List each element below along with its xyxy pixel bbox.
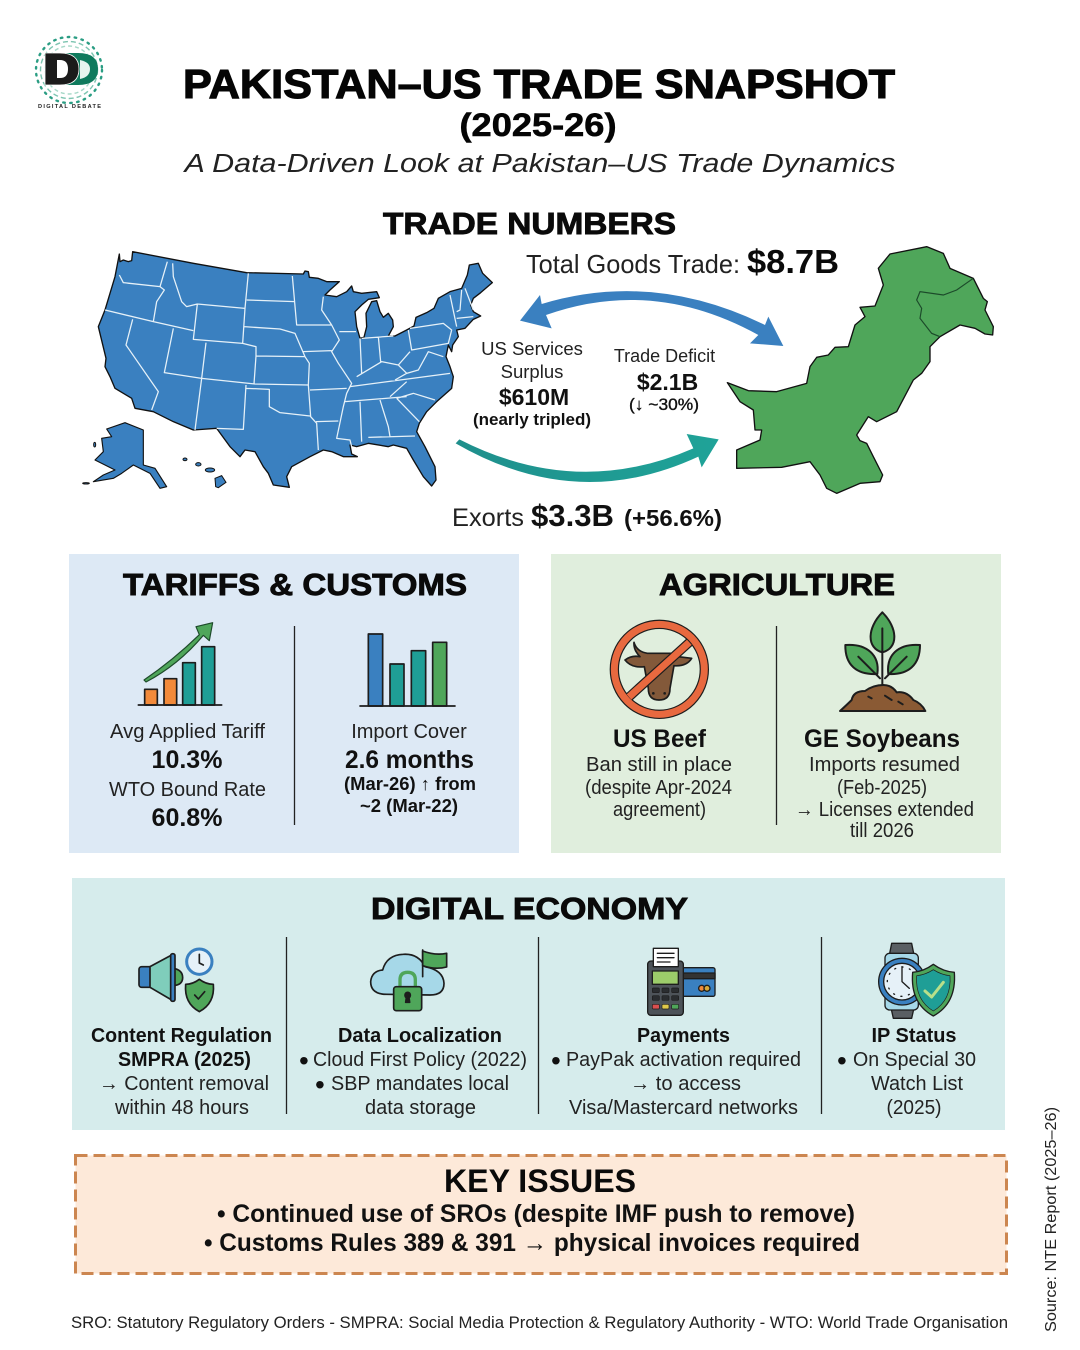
data localization: • — [315, 1069, 325, 1100]
US services surplus: (nearly tripled) — [473, 410, 591, 429]
glossary footer: SRO: Statutory Regulatory Orders - SMPRA: Social Media Protection & Regulatory Authority - WTO: World Trade Organisation — [71, 1314, 1008, 1332]
GE soybeans — [795, 725, 974, 842]
GE soybeans: → Licenses extended — [795, 799, 974, 821]
total goods trade: $8.7B — [747, 243, 839, 280]
arrow: two-way services trade — [520, 291, 783, 346]
heading: digital economy: DIGITAL ECONOMY — [371, 891, 688, 926]
total goods trade: Total Goods Trade: — [526, 249, 740, 279]
exports — [452, 498, 722, 533]
data localization: data storage — [365, 1097, 476, 1119]
trade deficit: $2.1B — [637, 369, 698, 395]
map: United States — [83, 252, 492, 488]
data localization: Data Localization — [338, 1025, 502, 1047]
exports: (+56.6%) — [624, 505, 722, 531]
panel: key issues — [76, 1156, 1006, 1274]
title — [183, 61, 895, 143]
US beef: agreement) — [613, 799, 706, 821]
US services surplus: Surplus — [501, 361, 563, 382]
data localization: Cloud First Policy (2022) — [313, 1049, 527, 1071]
icon: soybean sprout — [840, 612, 925, 711]
icon: cloud, lock and flag — [371, 950, 447, 1011]
exports: Exorts — [452, 504, 524, 532]
issues list: • Continued use of SROs (despite IMF push to remove) — [217, 1200, 855, 1228]
avg applied tariff and bound rate: 10.3% — [152, 746, 222, 774]
content regulation: → Content removal — [99, 1073, 269, 1095]
heading: agriculture: AGRICULTURE — [659, 567, 895, 602]
heading: tariffs and customs: TARIFFS & CUSTOMS — [123, 567, 467, 602]
subtitle: A Data-Driven Look at Pakistan–US Trade Dynamics — [182, 150, 896, 178]
payments: • — [551, 1045, 561, 1076]
payments — [551, 1025, 801, 1119]
heading: trade numbers: TRADE NUMBERS — [383, 206, 676, 241]
exports: $3.3B — [531, 498, 614, 533]
data localization: • — [299, 1045, 309, 1076]
import cover: 2.6 months — [345, 746, 474, 774]
trade deficit — [614, 346, 715, 414]
avg applied tariff and bound rate — [109, 721, 266, 832]
avg applied tariff and bound rate: 60.8% — [152, 804, 222, 832]
content regulation: within 48 hours — [114, 1097, 249, 1119]
US services surplus: $610M — [499, 384, 569, 410]
GE soybeans: GE Soybeans — [804, 725, 960, 753]
title: PAKISTAN–US TRADE SNAPSHOT — [183, 61, 895, 107]
IP status: (2025) — [886, 1097, 942, 1119]
US beef — [585, 725, 732, 821]
IP status — [837, 1025, 976, 1119]
issues list — [204, 1200, 860, 1257]
avg applied tariff and bound rate: WTO Bound Rate — [109, 779, 266, 801]
US beef: Ban still in place — [586, 754, 732, 776]
heading: key issues: KEY ISSUES — [444, 1163, 636, 1199]
map: Pakistan — [727, 247, 993, 493]
GE soybeans: (Feb-2025) — [837, 777, 927, 799]
icon: megaphone, clock and shield — [139, 949, 213, 1012]
arrow: exports to US — [456, 434, 719, 482]
total goods trade — [526, 243, 839, 280]
US beef: US Beef — [613, 725, 707, 753]
IP status: Watch List — [871, 1073, 963, 1095]
icon: watch and shield — [879, 943, 955, 1018]
data localization — [299, 1025, 527, 1119]
source note: Source: NTE Report (2025–26) — [1043, 1107, 1060, 1332]
panel: agriculture — [551, 554, 1001, 853]
content regulation — [91, 1025, 272, 1119]
data localization: SBP mandates local — [331, 1073, 509, 1095]
payments: Visa/Mastercard networks — [569, 1097, 798, 1119]
import cover: Import Cover — [351, 721, 467, 743]
logo: Digital Debate: DIGITAL DEBATE — [38, 104, 101, 110]
US services surplus: US Services — [481, 338, 583, 359]
IP status: IP Status — [872, 1025, 956, 1047]
trade deficit: Trade Deficit — [614, 346, 715, 366]
US beef: (despite Apr-2024 — [585, 777, 732, 799]
content regulation: SMPRA (2025) — [118, 1049, 251, 1071]
icon: import cover bars — [360, 634, 455, 706]
panel: tariffs and customs — [69, 554, 519, 853]
avg applied tariff and bound rate: Avg Applied Tariff — [110, 721, 265, 743]
import cover — [344, 721, 476, 816]
GE soybeans: till 2026 — [850, 820, 914, 842]
import cover: (Mar-26) ↑ from — [344, 774, 476, 794]
issues list: • Customs Rules 389 & 391 → physical invoices required — [204, 1229, 860, 1257]
GE soybeans: Imports resumed — [809, 754, 960, 776]
trade deficit: (↓ ~30%) — [629, 396, 699, 414]
IP status: • — [837, 1045, 847, 1076]
import cover: ~2 (Mar-22) — [360, 796, 458, 816]
IP status: On Special 30 — [853, 1049, 976, 1071]
title: (2025-26) — [460, 107, 616, 143]
US services surplus — [473, 338, 591, 429]
content regulation: Content Regulation — [91, 1025, 272, 1047]
payments: Payments — [637, 1025, 730, 1047]
icon: no beef — [614, 624, 704, 714]
panel: digital economy — [72, 878, 1005, 1130]
payments: → to access — [630, 1073, 741, 1095]
payments: PayPak activation required — [566, 1049, 801, 1071]
icon: rising bar chart — [138, 623, 222, 705]
logo: Digital Debate — [36, 37, 102, 110]
icon: card terminal and receipt — [648, 948, 715, 1015]
